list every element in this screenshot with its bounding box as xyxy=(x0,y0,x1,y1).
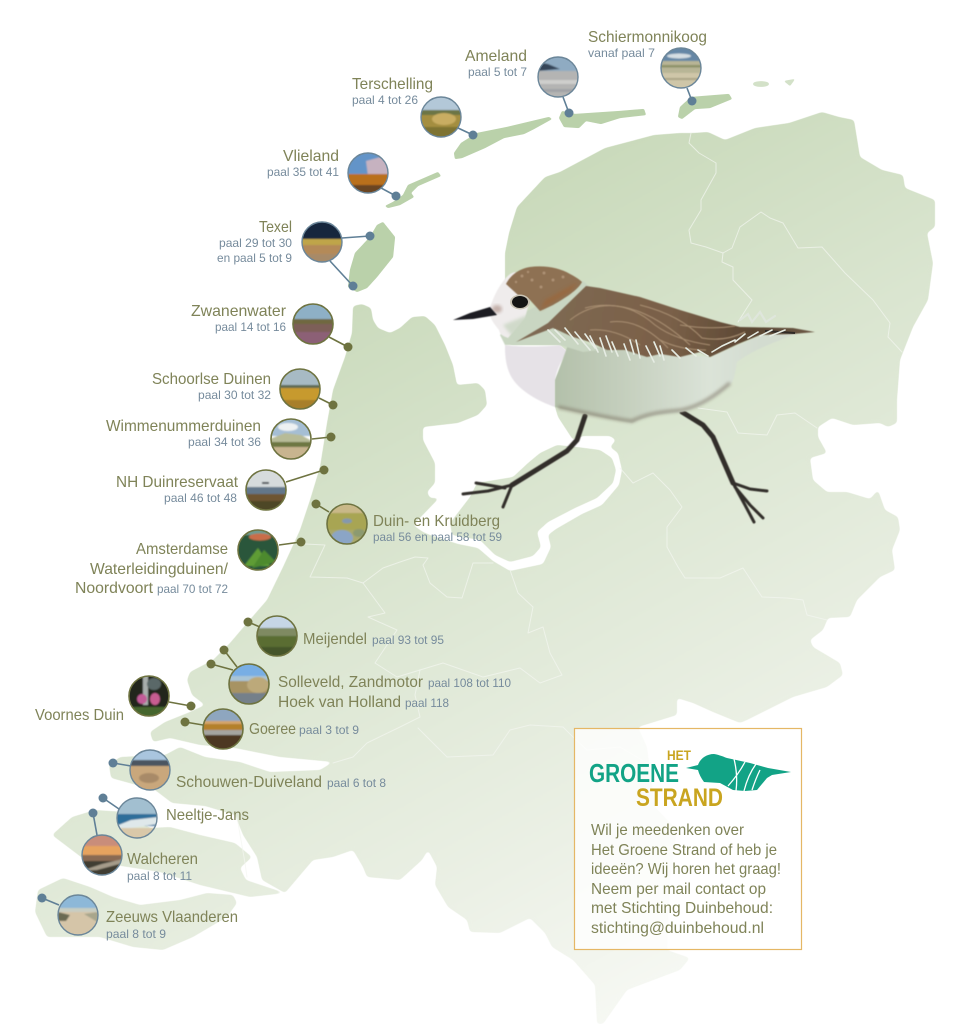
location: Vlieland xyxy=(267,148,400,200)
location: Solleveld, Zandmotor, Hoek van Holland xyxy=(206,646,511,711)
label: paal 93 tot 95 xyxy=(372,633,444,647)
label: paal 35 tot 41 xyxy=(267,165,339,179)
photo xyxy=(326,503,368,546)
logo bird xyxy=(686,754,791,791)
photo xyxy=(420,96,462,138)
label: Schoorlse Duinen xyxy=(152,371,271,388)
wing feather pattern xyxy=(570,305,745,350)
connector xyxy=(319,398,338,410)
label: paal 3 tot 9 xyxy=(299,723,359,737)
belly shadow xyxy=(558,383,730,421)
location: Schiermonnikoog xyxy=(588,29,707,106)
label: paal 46 tot 48 xyxy=(164,491,237,505)
location: Amsterdamse Waterleidingduinen / Noordvoort xyxy=(75,529,306,597)
photo xyxy=(228,663,270,705)
box frame xyxy=(574,728,802,950)
photo xyxy=(279,368,321,410)
label: Ameland xyxy=(465,48,527,65)
photo xyxy=(537,56,579,98)
Flevoland xyxy=(450,445,616,562)
bird: strandplevier xyxy=(453,266,815,522)
location: Walcheren xyxy=(81,808,198,883)
photo xyxy=(202,708,244,750)
connector xyxy=(329,337,352,352)
label xyxy=(106,909,238,941)
bird beak xyxy=(453,307,497,320)
location: Goeree xyxy=(180,708,359,750)
location: Schouwen-Duiveland xyxy=(108,749,386,791)
label: Neeltje-Jans xyxy=(166,807,249,824)
connector xyxy=(687,88,696,106)
label: Schiermonnikoog xyxy=(588,29,707,46)
connector xyxy=(180,718,203,726)
photo xyxy=(347,152,389,194)
label xyxy=(352,76,433,107)
contact text: met Stichting Duinbehoud: xyxy=(591,900,773,917)
location: Zeeuws Vlaanderen xyxy=(38,894,238,941)
labels: Solleveld, Zandmotor xyxy=(278,674,424,691)
label: paal 34 tot 36 xyxy=(188,435,261,449)
label: paal 14 tot 16 xyxy=(215,320,286,334)
beak base stain xyxy=(492,305,502,313)
connector xyxy=(312,432,336,442)
location: Voornes Duin xyxy=(35,675,196,724)
connector xyxy=(244,618,260,627)
province borders xyxy=(237,133,902,877)
photo xyxy=(57,894,99,936)
label: paal 8 tot 11 xyxy=(127,869,192,883)
photo xyxy=(292,303,334,345)
contact text: Het Groene Strand of heb je xyxy=(591,842,777,859)
photo xyxy=(81,834,123,876)
label: paal 6 tot 8 xyxy=(327,776,386,790)
photo xyxy=(129,749,171,791)
label: Waterleidingduinen/ xyxy=(90,561,229,578)
label: Walcheren xyxy=(127,851,198,868)
label: en paal 5 tot 9 xyxy=(217,251,292,265)
location: Duin- en Kruidberg xyxy=(312,500,502,546)
bird cap xyxy=(506,266,582,311)
photo xyxy=(116,797,158,839)
label xyxy=(303,631,444,648)
label xyxy=(267,148,339,179)
tail dark edge xyxy=(765,331,795,333)
location: Texel xyxy=(217,219,374,290)
mainland xyxy=(109,112,935,1024)
connector xyxy=(381,188,400,200)
labels: Hoek van Holland xyxy=(278,694,401,711)
label: Zwanenwater xyxy=(191,303,287,320)
label xyxy=(465,48,527,79)
label xyxy=(127,851,198,883)
connector xyxy=(458,128,478,140)
connector xyxy=(88,808,98,835)
label xyxy=(588,29,707,60)
photo xyxy=(301,221,343,263)
label xyxy=(373,513,502,544)
connector xyxy=(563,97,574,118)
location: NH Duinreservaat xyxy=(116,466,328,511)
label: Texel xyxy=(259,219,292,236)
label: paal 5 tot 7 xyxy=(468,65,527,79)
logo word HET: HET xyxy=(667,747,691,763)
label: paal 56 en paal 58 tot 59 xyxy=(373,530,502,544)
label xyxy=(217,219,292,265)
location: Wimmenummerduinen xyxy=(106,418,336,460)
labels: paal 108 tot 110 xyxy=(428,676,511,690)
label: paal 8 tot 9 xyxy=(106,927,166,941)
Zeeuws-Vlaanderen xyxy=(35,878,237,950)
photo xyxy=(256,615,298,657)
label xyxy=(116,474,239,505)
contact text: Wil je meedenken over xyxy=(591,822,745,839)
label: Goeree xyxy=(249,721,296,738)
Wadden islands xyxy=(348,79,795,292)
rusty cheek xyxy=(540,282,578,310)
contact text: ideeën? Wij horen het graag! xyxy=(591,861,781,878)
label: Schouwen-Duiveland xyxy=(176,774,322,791)
label: NH Duinreservaat xyxy=(116,474,239,491)
location: Ameland xyxy=(465,48,579,118)
photo xyxy=(245,469,287,511)
label: Amsterdamse xyxy=(136,541,228,558)
bird belly over white xyxy=(505,345,568,407)
label: Wimmenummerduinen xyxy=(106,418,261,435)
connector xyxy=(312,500,329,512)
label: Noordvoort xyxy=(75,580,154,597)
label xyxy=(75,541,229,597)
label: Vlieland xyxy=(283,148,339,165)
neck collar xyxy=(500,281,600,352)
frayed feather edge xyxy=(548,312,785,362)
label: Duin- en Kruidberg xyxy=(373,513,500,530)
label: Zeeuws Vlaanderen xyxy=(106,909,238,926)
photo xyxy=(660,47,702,89)
label xyxy=(152,371,271,402)
label: paal 29 tot 30 xyxy=(219,236,292,250)
location: Meijendel xyxy=(244,615,444,657)
connector xyxy=(286,466,328,482)
logo: Het Groene Strand xyxy=(589,747,791,812)
cap speckles xyxy=(515,271,564,288)
label xyxy=(106,418,261,449)
throat xyxy=(503,312,540,336)
bird belly over map xyxy=(555,331,800,423)
bird eye xyxy=(510,294,530,310)
logo word GROENE: GROENE xyxy=(589,758,679,788)
logo word STRAND: STRAND xyxy=(636,784,723,812)
bird legs xyxy=(463,412,767,522)
label xyxy=(191,303,287,334)
bird head xyxy=(490,272,532,338)
labels xyxy=(278,674,511,711)
connector xyxy=(279,538,306,546)
contact text: Neem per mail contact op xyxy=(591,881,766,898)
photo xyxy=(128,675,170,717)
Walcheren and Zuid-Beveland xyxy=(52,810,285,897)
contact text xyxy=(591,822,781,937)
label: paal 4 tot 26 xyxy=(352,93,418,107)
label: Terschelling xyxy=(352,76,433,93)
label: Voornes Duin xyxy=(35,707,124,724)
photo xyxy=(270,418,312,460)
labels: paal 118 xyxy=(405,696,449,710)
location: Terschelling xyxy=(352,76,478,140)
location: Schoorlse Duinen xyxy=(152,368,338,410)
label: vanaf paal 7 xyxy=(588,46,655,60)
connectors xyxy=(330,232,374,290)
label xyxy=(249,721,359,738)
panel: contact box xyxy=(574,728,802,950)
connector xyxy=(38,894,59,905)
label: paal 30 tot 32 xyxy=(198,388,271,402)
connector xyxy=(98,794,119,809)
connector xyxy=(169,702,196,710)
photo xyxy=(237,529,279,571)
connector xyxy=(108,758,131,768)
contact text: stichting@duinbehoud.nl xyxy=(591,920,764,937)
label: Meijendel xyxy=(303,631,367,648)
label: paal 70 tot 72 xyxy=(157,582,228,596)
bird wing xyxy=(516,286,815,357)
connectors xyxy=(206,646,237,670)
location: Zwanenwater xyxy=(191,303,352,352)
location: Neeltje-Jans xyxy=(98,794,249,839)
